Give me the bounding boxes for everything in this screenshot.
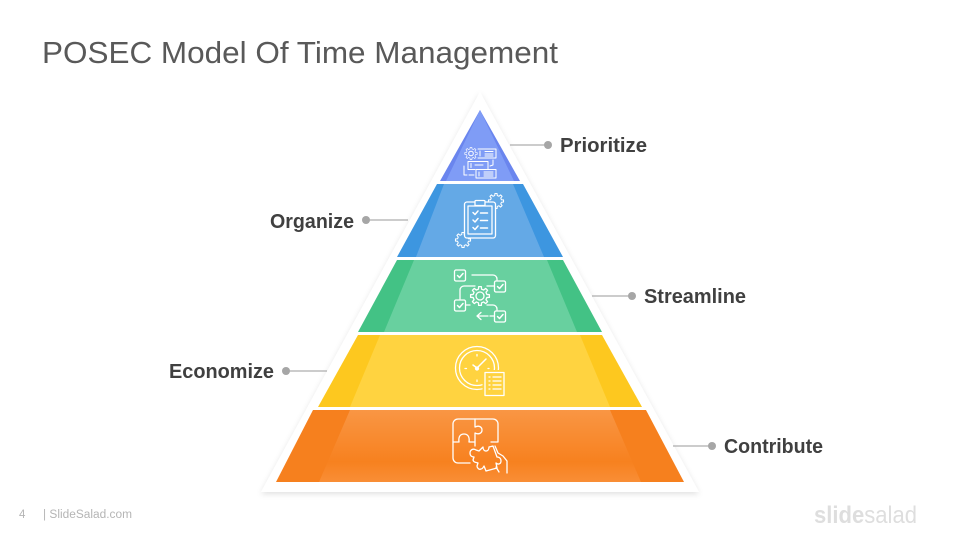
pyramid level 2: Organize (397, 184, 563, 257)
icon: puzzle pieces and hand (453, 419, 507, 473)
label: Organize (270, 211, 408, 233)
label: Streamline (592, 286, 746, 308)
pyramid backing (261, 92, 699, 492)
footer source: | SlideSalad.com (43, 509, 132, 521)
pyramid level 1: Prioritize (440, 110, 520, 181)
label: Contribute (673, 436, 823, 458)
icon: clipboard checklist with gears (455, 193, 504, 248)
label: Economize (169, 361, 327, 383)
pyramid level 5: Contribute (276, 410, 684, 482)
label: Prioritize (510, 135, 647, 157)
icon: gears and numbered steps (464, 147, 496, 178)
page number: 4 (19, 509, 26, 521)
pyramid level 3: Streamline (358, 260, 602, 332)
icon: clock with document (456, 346, 506, 398)
icon: workflow gear with check boxes (454, 270, 506, 322)
label: Economize: Economize (169, 361, 274, 383)
title: POSEC Model Of Time Management (42, 35, 558, 70)
label: Streamline: Streamline (644, 286, 746, 308)
label: Organize: Organize (270, 211, 354, 233)
label: Contribute: Contribute (724, 436, 823, 458)
pyramid level 4: Economize (318, 335, 642, 407)
label: Prioritize: Prioritize (560, 135, 647, 157)
brand watermark: slidesalad (814, 502, 917, 529)
